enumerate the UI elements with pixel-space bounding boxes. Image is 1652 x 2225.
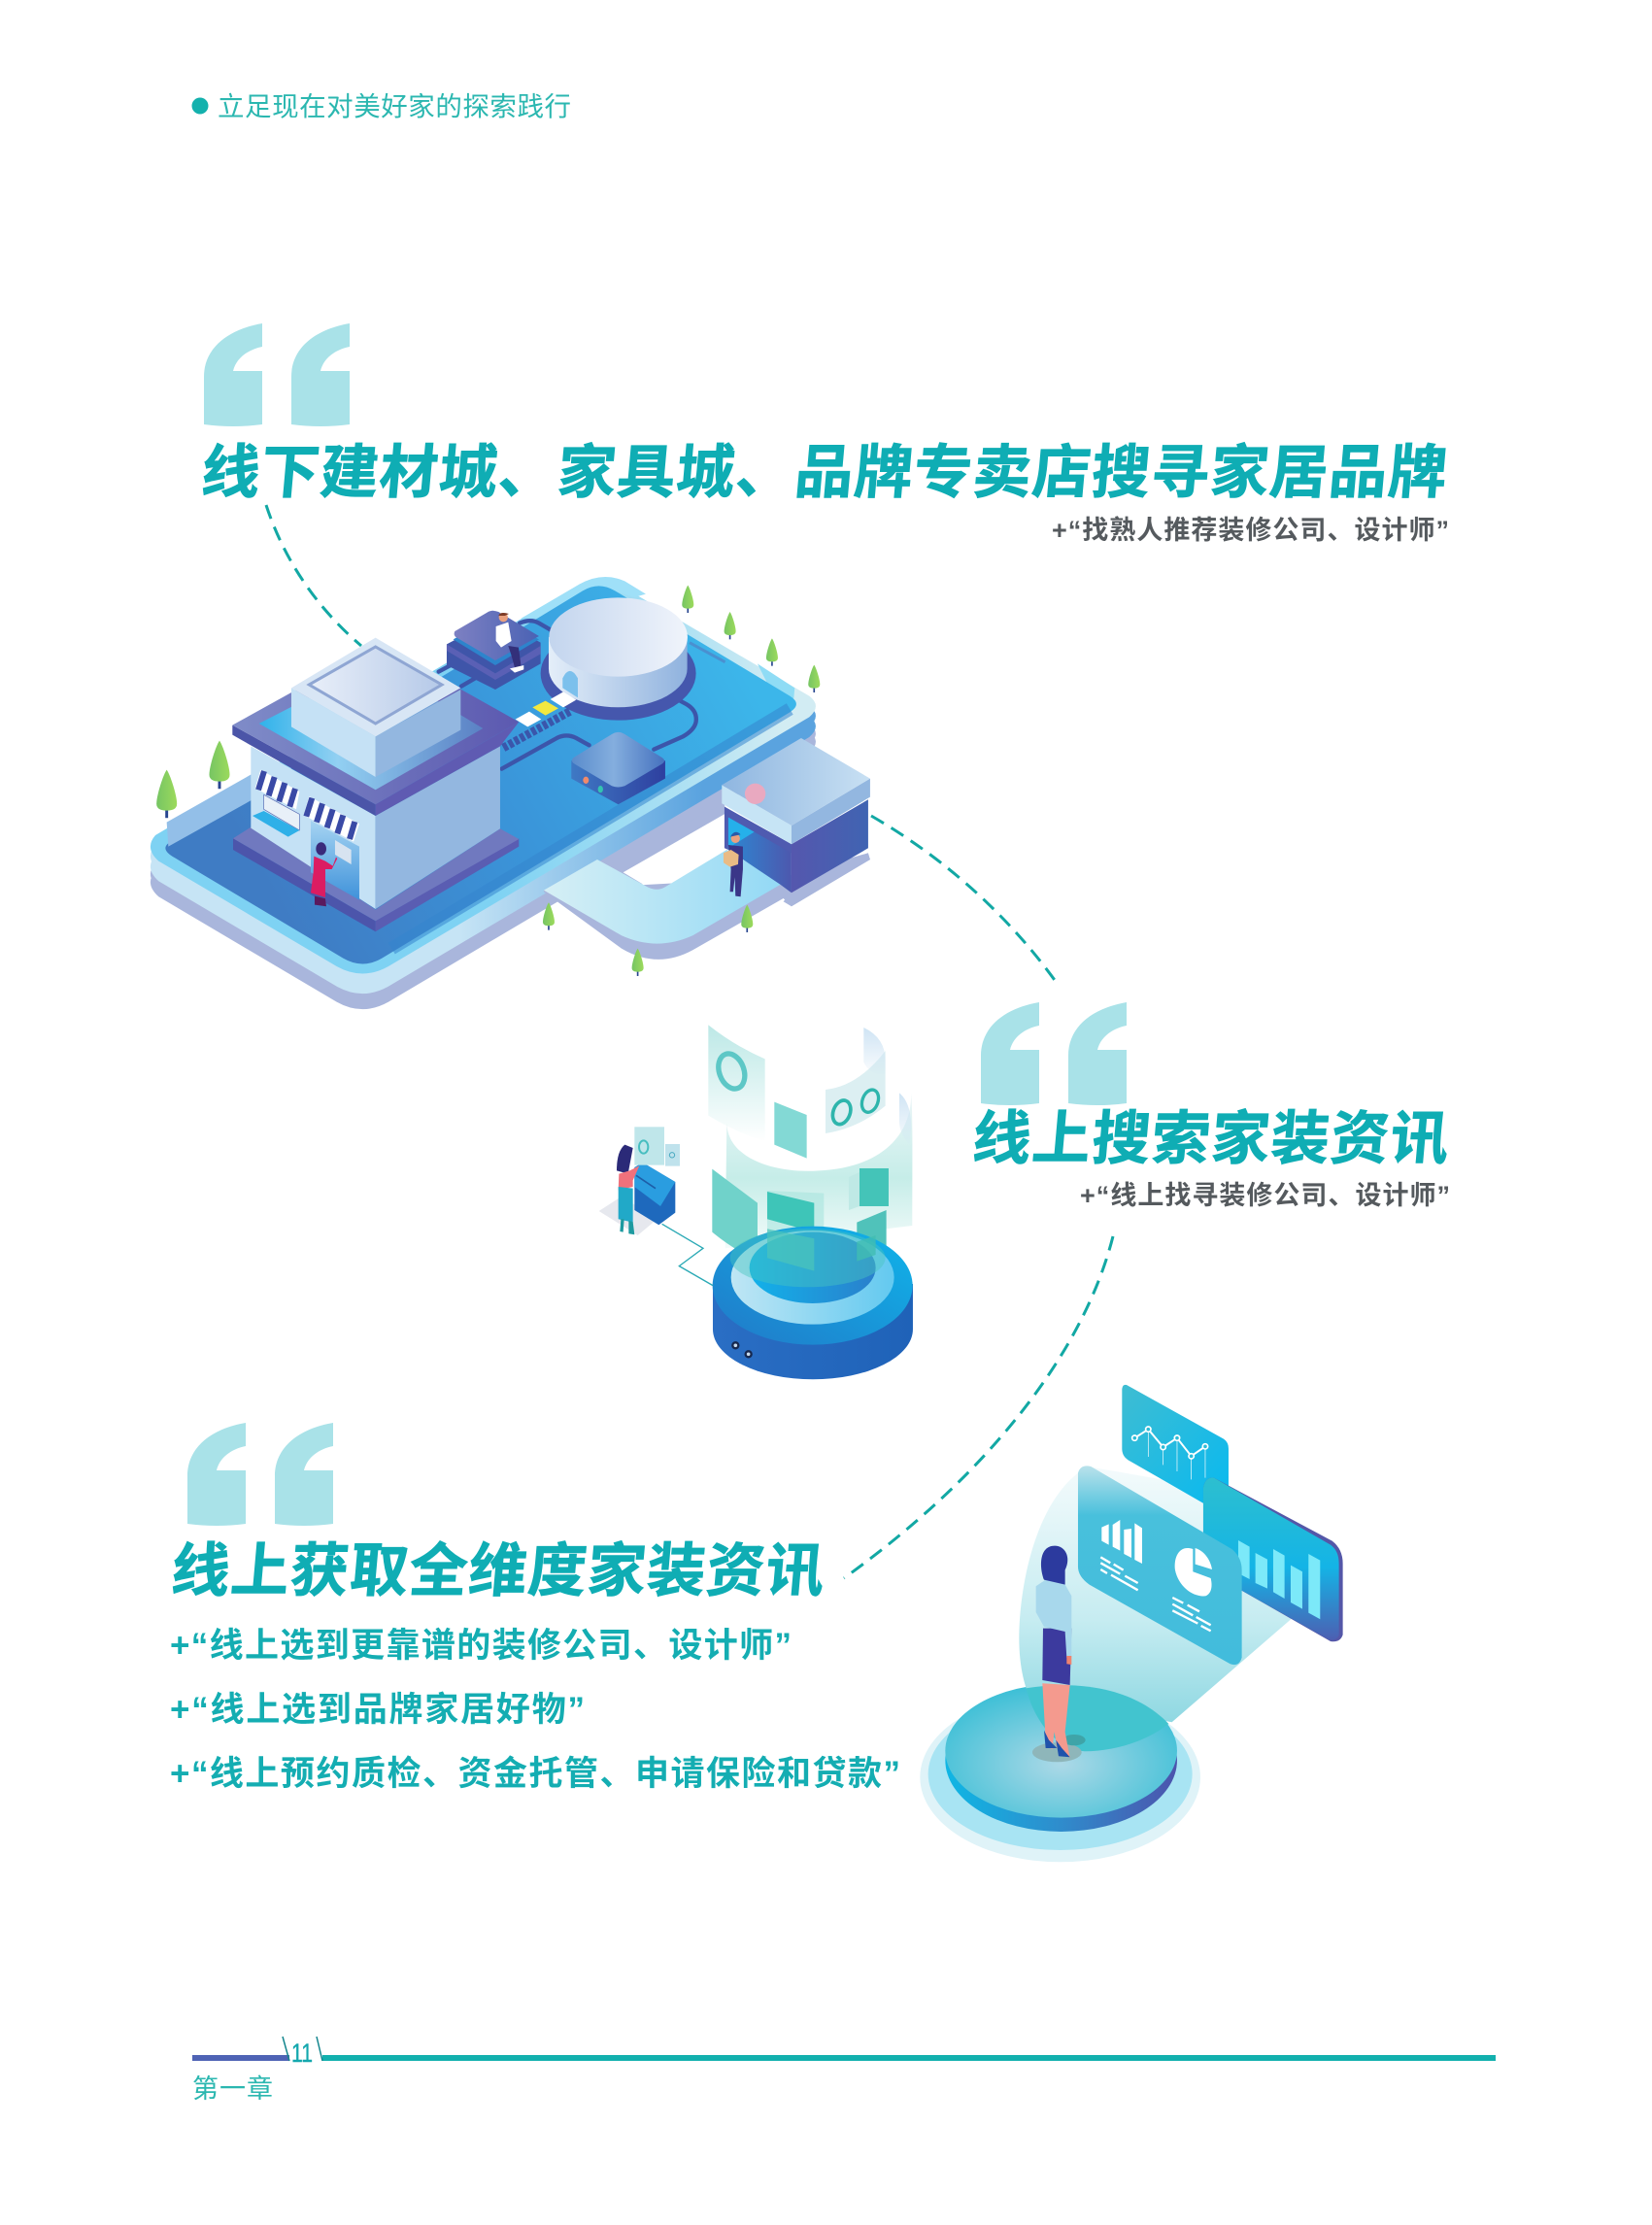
quote block 2 [970,1002,1452,1210]
woman at terminal [617,1145,639,1234]
illustration: hologram puck with woman at terminal [599,1025,913,1379]
list line 2: +“线上选到品牌家居好物” [170,1691,585,1729]
rooftop box [291,688,376,777]
illustration: woman viewing data panels on disc [920,1385,1343,1862]
quote mark 3 [187,1423,333,1526]
heading 1: 线下建材城、家具城、品牌专卖店搜寻家居品牌 [199,440,1450,505]
store building [232,638,519,931]
header: section label [192,91,571,121]
window [264,794,299,830]
roof slab [232,725,376,816]
person: woman in red at store door [311,842,337,906]
connecting cable [662,1224,713,1286]
list line 3: +“线上预约质检、资金托管、申请保险和贷款” [170,1755,900,1793]
dashed connector 2 [871,816,1057,983]
page number: 11 [291,2039,313,2068]
data panel: bar chart [1203,1477,1343,1641]
data panel: dashboard [1078,1466,1242,1665]
footer rule: blue [192,2055,289,2061]
illustration: isometric phone platform with store [151,577,870,1009]
woman standing [1032,1546,1086,1762]
dashed connector 1 [266,505,361,646]
person: delivery worker with parcel [724,832,743,896]
router box [571,732,665,804]
quote mark 1 [204,323,350,426]
kiosk booth [722,738,870,906]
header dot [192,97,208,115]
header text: 立足现在对美好家的探索践行 [218,91,571,121]
chapter label: 第一章 [192,2074,273,2104]
hologram cylinder band [725,1093,912,1248]
light beam [1019,1466,1292,1722]
colored floor tiles [503,691,576,748]
cylinder building [541,597,696,721]
footer rule: teal [322,2055,1496,2061]
quote block 3 [169,1423,900,1793]
hologram panel with two rings [826,1028,911,1145]
page number brackets [283,2037,322,2061]
pipes and connectors [439,621,696,769]
footer [192,2037,1496,2104]
trees [156,586,820,976]
quote mark 2 [981,1002,1127,1105]
hologram panel with ring [708,1025,765,1141]
seat block with seated person [447,611,541,690]
terminal desk [599,1163,675,1235]
awning [255,770,359,842]
disc [945,1684,1177,1832]
list line 1: +“线上选到更靠谱的装修公司、设计师” [170,1627,792,1665]
floating screens [634,1127,680,1166]
dashed connector 3 [844,1236,1113,1578]
data panel: line chart [1122,1385,1229,1503]
heading 2: 线上搜索家装资讯 [970,1106,1452,1171]
walkway [544,803,870,960]
heading 3: 线上获取全维度家装资讯 [169,1538,827,1603]
quote block 1 [199,323,1450,545]
subtext 1: +“找熟人推荐装修公司、设计师” [1052,515,1449,545]
hologram teal cards [712,1102,889,1271]
subtext 2: +“线上找寻装修公司、设计师” [1080,1181,1450,1210]
hologram base puck [713,1227,913,1379]
disc halo [920,1693,1200,1862]
store door [311,821,359,900]
beam on disc [1027,1685,1168,1751]
platform base layers [151,577,816,1009]
